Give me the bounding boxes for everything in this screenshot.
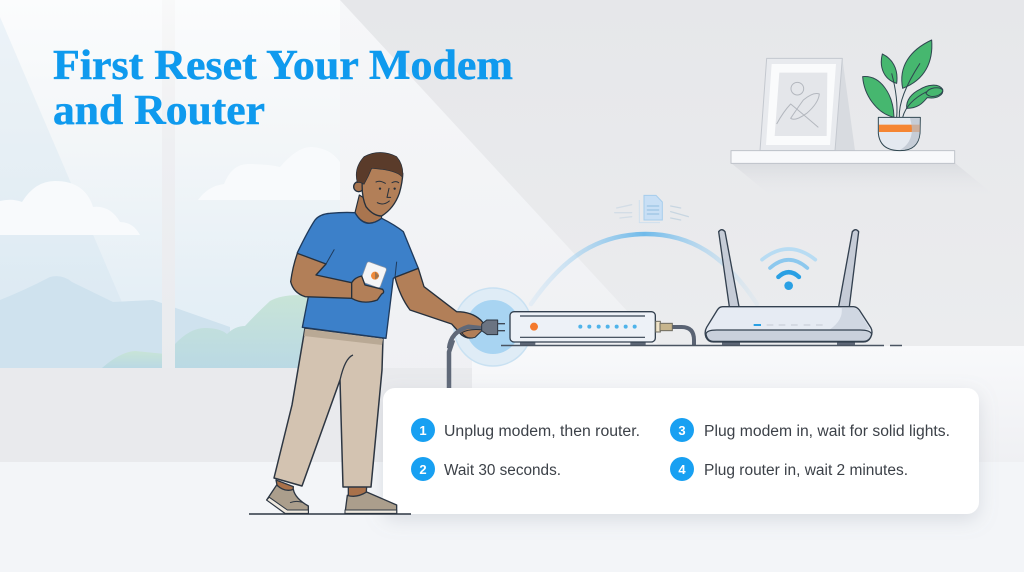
hand on phone: [352, 276, 384, 302]
step 3: [670, 418, 950, 442]
status lights: [578, 325, 637, 329]
plant pot: [878, 117, 920, 151]
router lights: [754, 324, 761, 326]
shirt: [297, 212, 418, 338]
neck: [355, 195, 382, 223]
step 2: [411, 457, 561, 481]
power light: [530, 323, 538, 331]
upper power cable: [449, 327, 483, 348]
modem: [510, 312, 694, 346]
shelf with frame and plant: [731, 40, 955, 163]
step 2: 2: [419, 462, 427, 477]
clouds: [0, 147, 340, 235]
title: First Reset Your Modem: [53, 43, 513, 89]
fingers over cable: [462, 330, 483, 338]
arc between modem and router: [531, 234, 757, 304]
step 1: 1: [419, 423, 427, 438]
person: [249, 152, 505, 514]
coax connector and cable: [656, 321, 694, 346]
frame back leg: [835, 58, 855, 151]
floor: [0, 462, 1024, 572]
plug: [482, 320, 505, 335]
background: light beam on wall: [340, 0, 700, 390]
step 4: 4: [678, 462, 686, 477]
head: [354, 152, 403, 216]
arm holding phone: [291, 253, 352, 298]
step 3: Plug modem in, wait for solid lights.: [704, 423, 950, 440]
trousers: [274, 328, 383, 487]
step 1: [411, 418, 640, 442]
step 1: Unplug modem, then router.: [444, 423, 640, 440]
table: [472, 346, 1024, 462]
step 3: 3: [678, 423, 686, 438]
title: [53, 43, 513, 134]
arm reaching to plug: [395, 268, 485, 338]
steps card: [383, 388, 979, 514]
table edge line: [501, 344, 902, 346]
power cable lower run: [449, 340, 453, 392]
step 4: Plug router in, wait 2 minutes.: [704, 462, 908, 479]
picture frame: [760, 58, 842, 151]
floor band: [0, 368, 1024, 462]
step 2: Wait 30 seconds.: [444, 462, 561, 479]
window mullion: [162, 0, 175, 368]
modem body: [510, 312, 655, 342]
document icon with motion lines: [615, 195, 688, 223]
modem feet: [520, 342, 535, 346]
router antennas: [719, 230, 739, 307]
window view: [0, 0, 340, 368]
shoes: [267, 480, 397, 513]
router feet: [722, 342, 740, 346]
router body: [705, 307, 872, 342]
phone: [360, 261, 387, 288]
wifi icon: [762, 249, 815, 290]
sun ray tint: [0, 17, 150, 368]
router: [705, 230, 872, 346]
hills: [102, 295, 310, 368]
shelf shadow: [731, 163, 994, 195]
step 4: [670, 457, 908, 481]
plant leaves: [863, 40, 943, 117]
mountains: [0, 276, 230, 368]
plug glow: [454, 288, 532, 366]
ground line: [249, 513, 411, 515]
title: and Router: [53, 88, 265, 134]
shelf: [731, 151, 955, 163]
